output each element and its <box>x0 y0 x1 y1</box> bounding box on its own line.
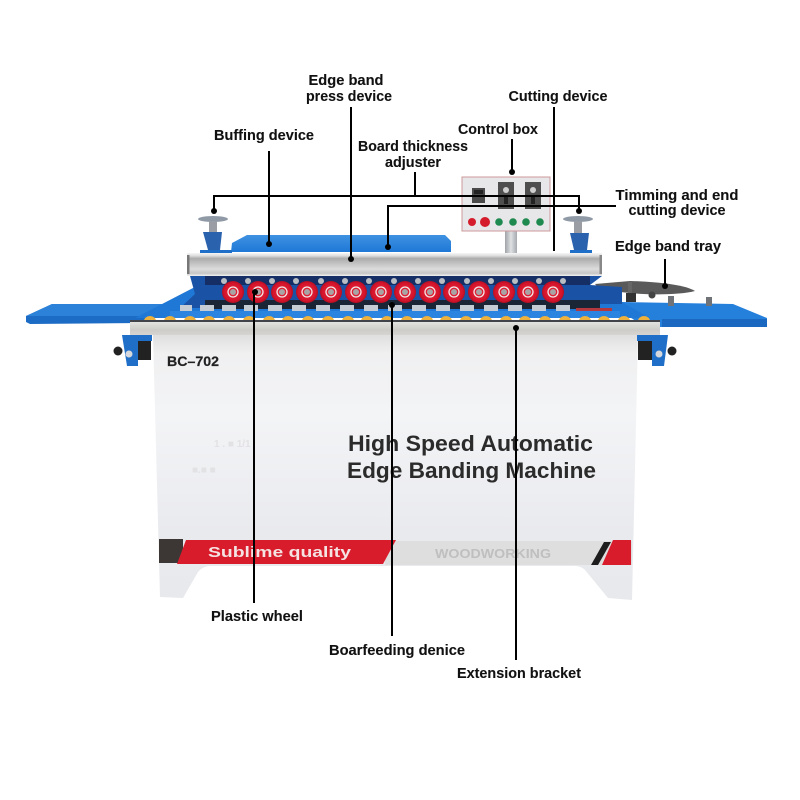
callout dots <box>211 169 668 331</box>
stripe band: WOODWORKING <box>435 547 551 561</box>
machine title: Edge Banding Machine <box>347 458 596 483</box>
feed rollers <box>180 305 570 311</box>
label: control box: Control box <box>458 122 538 138</box>
left bracket <box>114 335 152 366</box>
right handwheel <box>563 216 593 253</box>
label: adjuster: adjuster <box>385 155 441 171</box>
label: plastic wheel: Plastic wheel <box>211 609 303 625</box>
control box <box>462 177 550 231</box>
leader: cutting device <box>553 107 555 251</box>
label: timming and end: Timming and end <box>616 188 738 204</box>
red inlay <box>576 308 612 311</box>
leader: edge band press device <box>350 107 352 259</box>
table front strip <box>170 311 620 318</box>
machine <box>26 177 767 600</box>
label: edge band press device: Edge band <box>308 73 384 89</box>
right extension wing <box>622 302 767 327</box>
control box stand <box>505 230 517 253</box>
leader: control box <box>511 139 513 172</box>
label: cutting device: Cutting device <box>508 89 608 105</box>
leader: extension bracket <box>515 328 517 660</box>
machine title: High Speed Automatic <box>348 431 593 456</box>
machine body <box>153 335 638 600</box>
blue top cover <box>231 235 451 252</box>
leader: buffing device <box>268 151 270 244</box>
stripe band: Sublime quality <box>208 545 351 561</box>
machine title <box>347 431 596 483</box>
label: cutting device: cutting device <box>628 203 726 219</box>
label: board thickness: Board thickness <box>358 139 468 155</box>
leader: edge band tray <box>664 259 666 286</box>
label: extension bracket: Extension bracket <box>457 666 581 682</box>
faded body text: ■.■ ■ <box>192 465 216 476</box>
hex bolts <box>221 278 566 284</box>
blue table <box>135 288 650 318</box>
yellow guide wheels <box>144 316 650 321</box>
silver press beam <box>187 253 602 276</box>
leader: board thickness adjuster <box>414 172 416 196</box>
edge band tray <box>595 281 712 306</box>
callout lines <box>214 107 665 660</box>
red pressure wheels <box>222 281 564 303</box>
faded body text: 1 . ■ 1/1 <box>214 439 251 450</box>
label: boarfeeding denice: Boarfeeding denice <box>329 643 465 659</box>
label: edge band tray: Edge band tray <box>615 239 721 255</box>
faded body text <box>192 439 251 476</box>
leader: boarfeeding device <box>391 305 393 636</box>
leader: plastic wheel <box>253 292 255 603</box>
label: buffing device: Buffing device <box>214 128 314 144</box>
roller bay <box>180 276 622 308</box>
right bracket <box>637 335 676 366</box>
model label: BC–702 <box>167 354 219 369</box>
label: press device: press device <box>306 89 392 105</box>
leader: top cover to label <box>388 206 616 247</box>
leader: timming and end cutting device <box>214 196 579 211</box>
left extension wing <box>26 304 170 324</box>
left handwheel <box>198 216 232 253</box>
silver front rail <box>130 320 660 335</box>
stripe band <box>159 539 632 565</box>
